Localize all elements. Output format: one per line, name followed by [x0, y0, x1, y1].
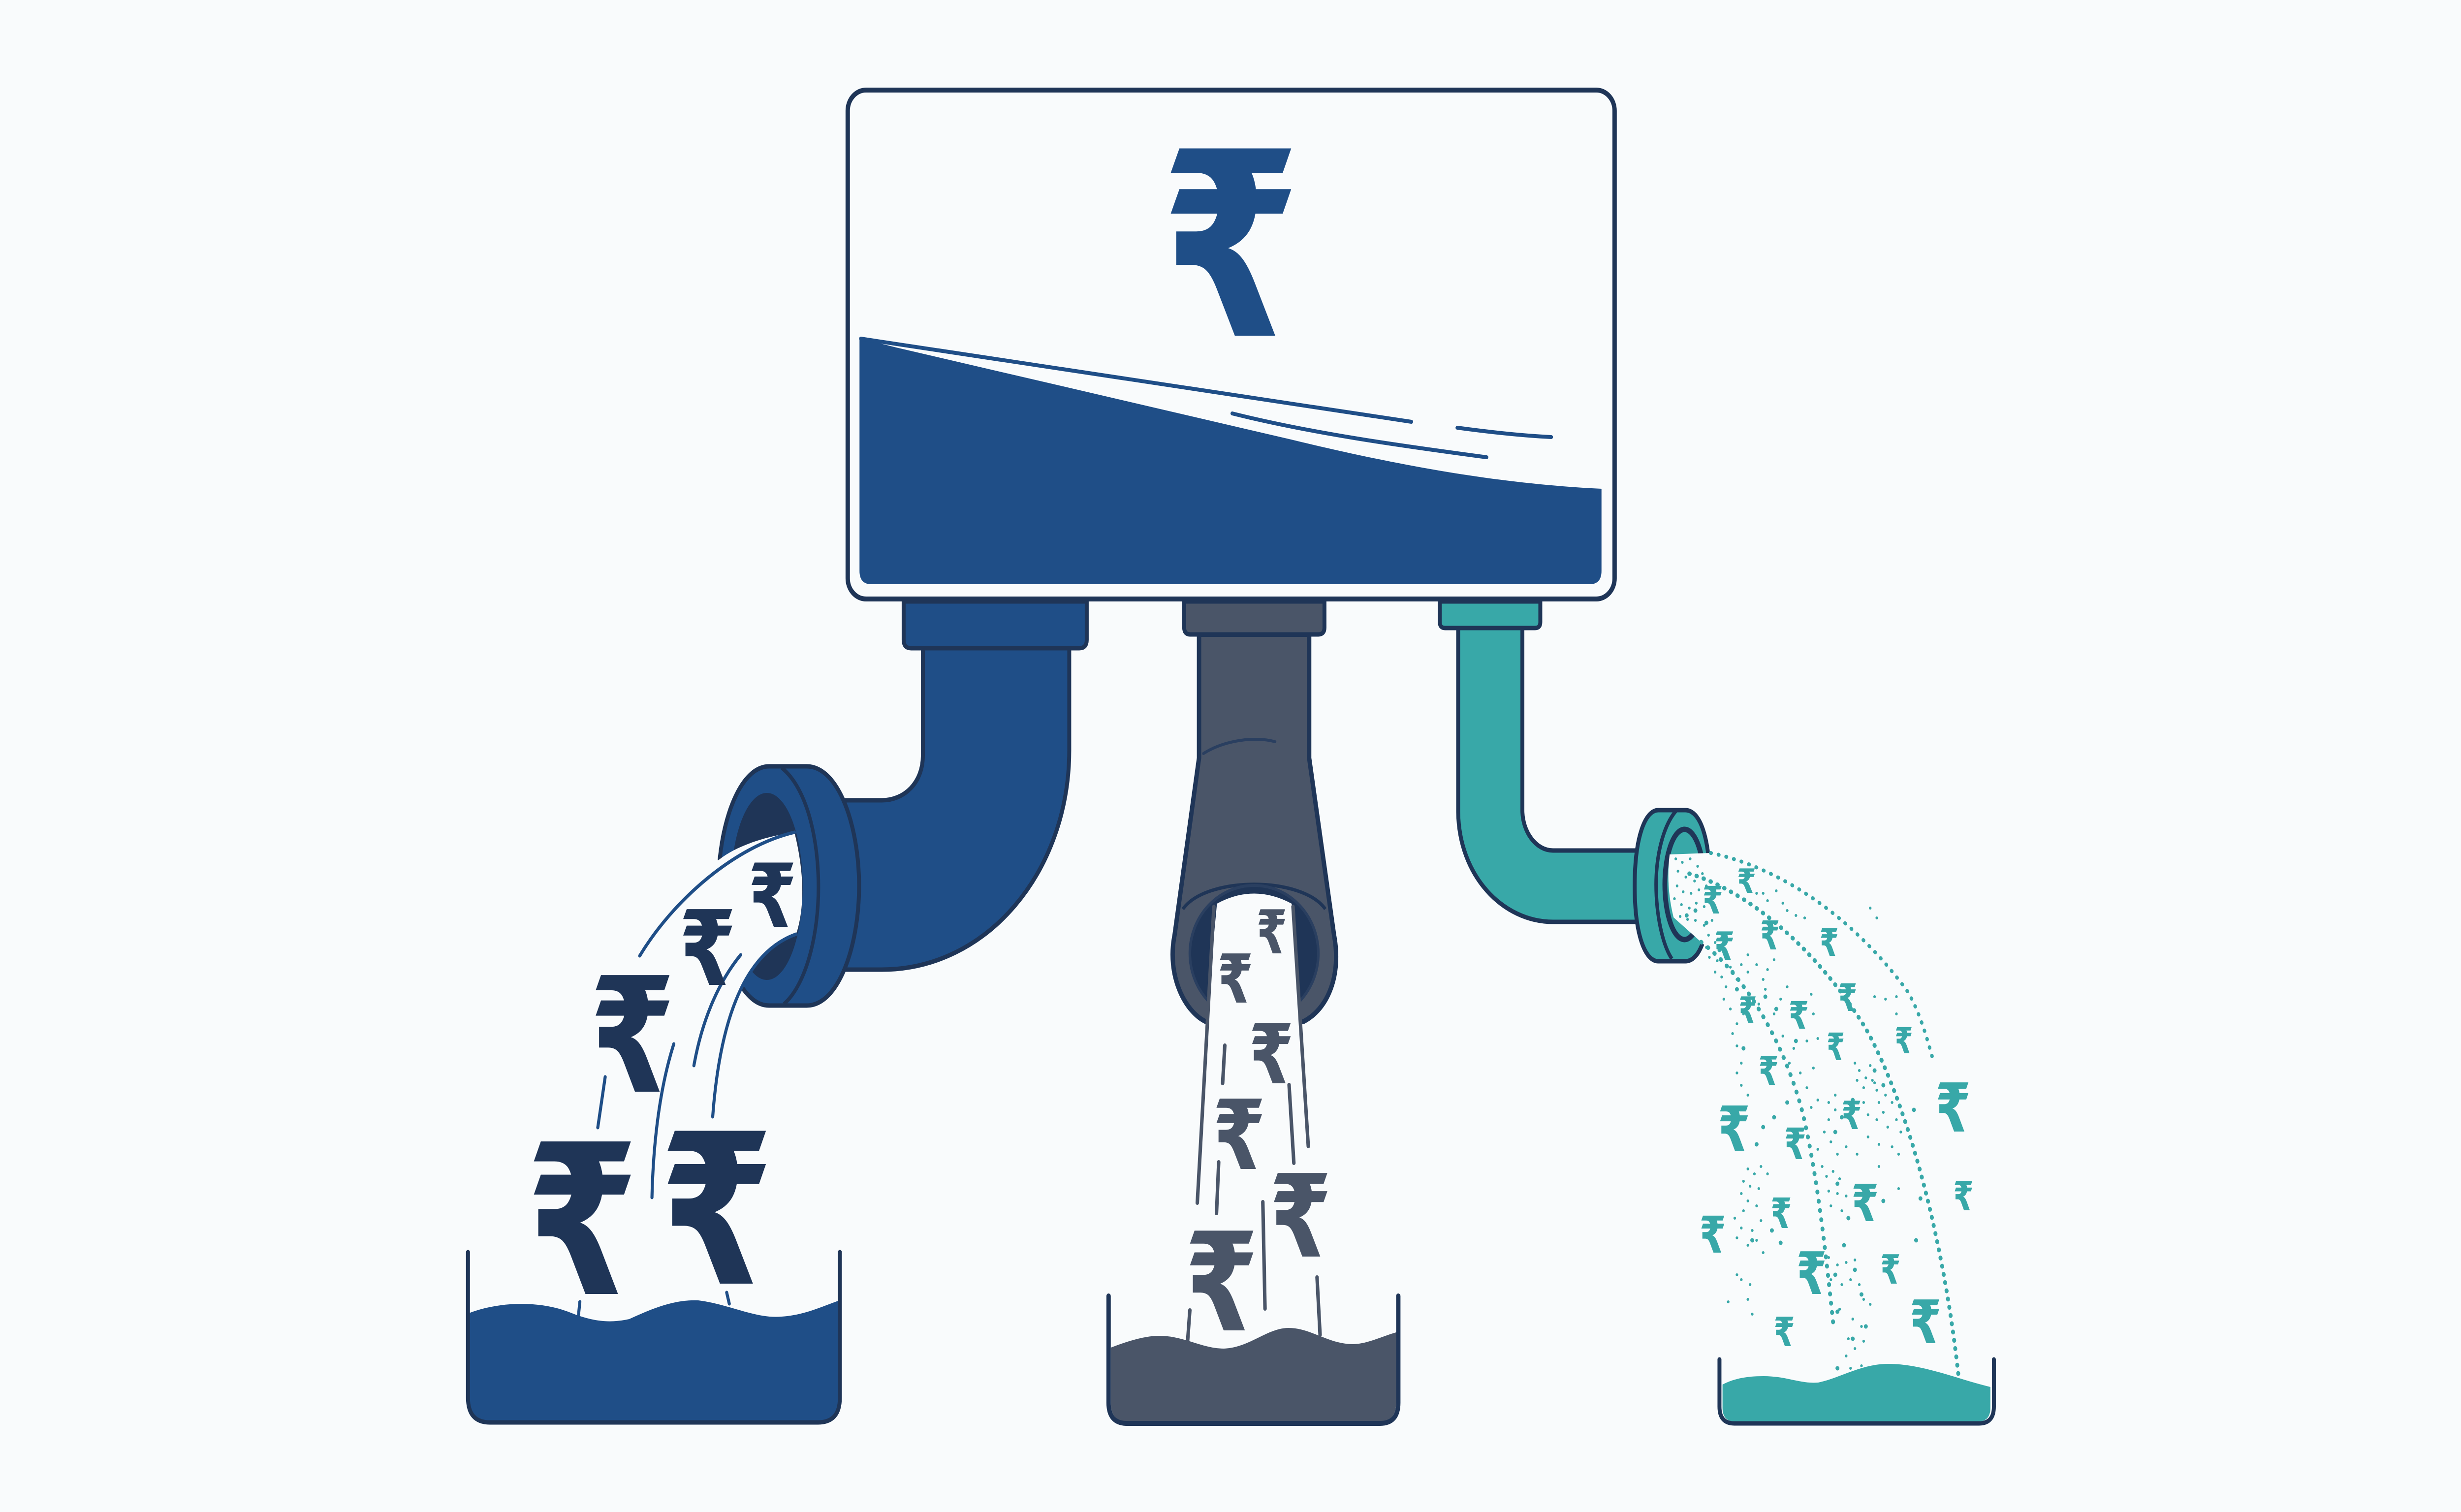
grey falling rupees: ₹	[1217, 940, 1253, 1019]
teal falling rupees: ₹	[1738, 990, 1757, 1032]
teal falling rupees: ₹	[1838, 976, 1857, 1020]
grey falling rupees: ₹	[1269, 1151, 1332, 1284]
teal falling rupees: ₹	[1789, 994, 1809, 1038]
teal falling rupees	[1700, 862, 1974, 1357]
grey flow lines	[1188, 907, 1320, 1340]
blue falling rupees: ₹	[660, 1089, 774, 1333]
teal falling rupees: ₹	[1880, 1246, 1901, 1293]
teal falling rupees: ₹	[1703, 879, 1723, 923]
teal pipe mouth edge	[1656, 811, 1676, 959]
teal dotted spray arcs	[1689, 853, 1958, 1376]
blue flow lines	[578, 832, 796, 1315]
blue pipe flange	[904, 601, 1087, 648]
teal falling rupees: ₹	[1700, 1205, 1726, 1265]
blue pipe opening	[731, 793, 803, 980]
blue bucket walls	[468, 1252, 840, 1422]
blue falling rupees: ₹	[526, 1100, 639, 1344]
teal pipe flange	[1440, 601, 1540, 628]
falling water level in tank	[859, 338, 1602, 584]
teal pipe spray opening	[1669, 853, 1748, 984]
blue pipe mouth ring	[719, 766, 859, 1006]
water level trace lines	[861, 339, 1551, 457]
teal falling rupees: ₹	[1737, 862, 1756, 901]
teal falling rupees: ₹	[1910, 1288, 1941, 1357]
teal pipe mouth ring	[1635, 810, 1710, 961]
blue falling rupees: ₹	[748, 846, 797, 948]
pipe: large blue outlet	[468, 601, 1087, 1422]
teal falling rupees: ₹	[1852, 1174, 1879, 1233]
grey falling rupees: ₹	[1185, 1203, 1259, 1363]
grey pipe rim	[1183, 884, 1325, 909]
teal falling rupees: ₹	[1774, 1309, 1795, 1356]
blue bucket	[468, 1252, 840, 1422]
teal pipe opening	[1665, 829, 1704, 940]
pipe: medium grey outlet	[1108, 601, 1398, 1423]
teal falling rupees: ₹	[1760, 913, 1780, 959]
teal falling rupees: ₹	[1935, 1069, 1971, 1148]
teal falling rupees: ₹	[1797, 1240, 1827, 1308]
teal falling rupees: ₹	[1841, 1094, 1862, 1138]
grey falling rupees	[1185, 898, 1332, 1363]
grey falling rupees: ₹	[1213, 1079, 1266, 1192]
teal falling rupees: ₹	[1953, 1173, 1974, 1220]
teal bucket	[1719, 1359, 1994, 1423]
teal falling rupees: ₹	[1827, 1025, 1845, 1070]
grey pipe opening	[1190, 885, 1318, 1021]
teal bucket water	[1723, 1364, 1990, 1421]
grey bucket	[1108, 1296, 1398, 1423]
teal bucket walls	[1719, 1359, 1994, 1423]
teal pipe elbow	[1458, 628, 1643, 922]
teal falling rupees: ₹	[1894, 1021, 1913, 1062]
tank	[848, 90, 1614, 599]
grey falling rupees: ₹	[1256, 898, 1287, 968]
teal spray droplets	[1674, 859, 1921, 1368]
pipe: thin teal outlet	[1440, 601, 1994, 1423]
grey pipe outflow	[1205, 894, 1302, 1029]
blue pipe elbow	[844, 648, 1069, 970]
icon: rupee symbol on tank: ₹	[1161, 97, 1301, 396]
teal falling rupees: ₹	[1714, 924, 1735, 969]
teal falling rupees: ₹	[1784, 1119, 1806, 1170]
blue bucket water	[469, 1300, 838, 1420]
teal falling rupees: ₹	[1718, 1094, 1750, 1166]
grey pipe flange	[1184, 601, 1325, 634]
teal falling rupees: ₹	[1770, 1189, 1792, 1238]
blue falling rupees: ₹	[590, 943, 675, 1130]
tank outline	[848, 90, 1614, 599]
grey pipe seam	[1203, 739, 1275, 754]
blue pipe mouth edge	[782, 768, 819, 1004]
blue falling rupees: ₹	[679, 888, 736, 1009]
teal falling rupees: ₹	[1820, 921, 1839, 965]
blue falling rupees	[526, 846, 797, 1344]
grey bucket water	[1111, 1328, 1396, 1421]
teal falling rupees: ₹	[1758, 1048, 1779, 1094]
blue pipe outflow	[656, 832, 802, 999]
grey pipe bell	[1172, 634, 1336, 1022]
grey falling rupees: ₹	[1249, 1007, 1294, 1103]
grey bucket walls	[1108, 1296, 1398, 1423]
